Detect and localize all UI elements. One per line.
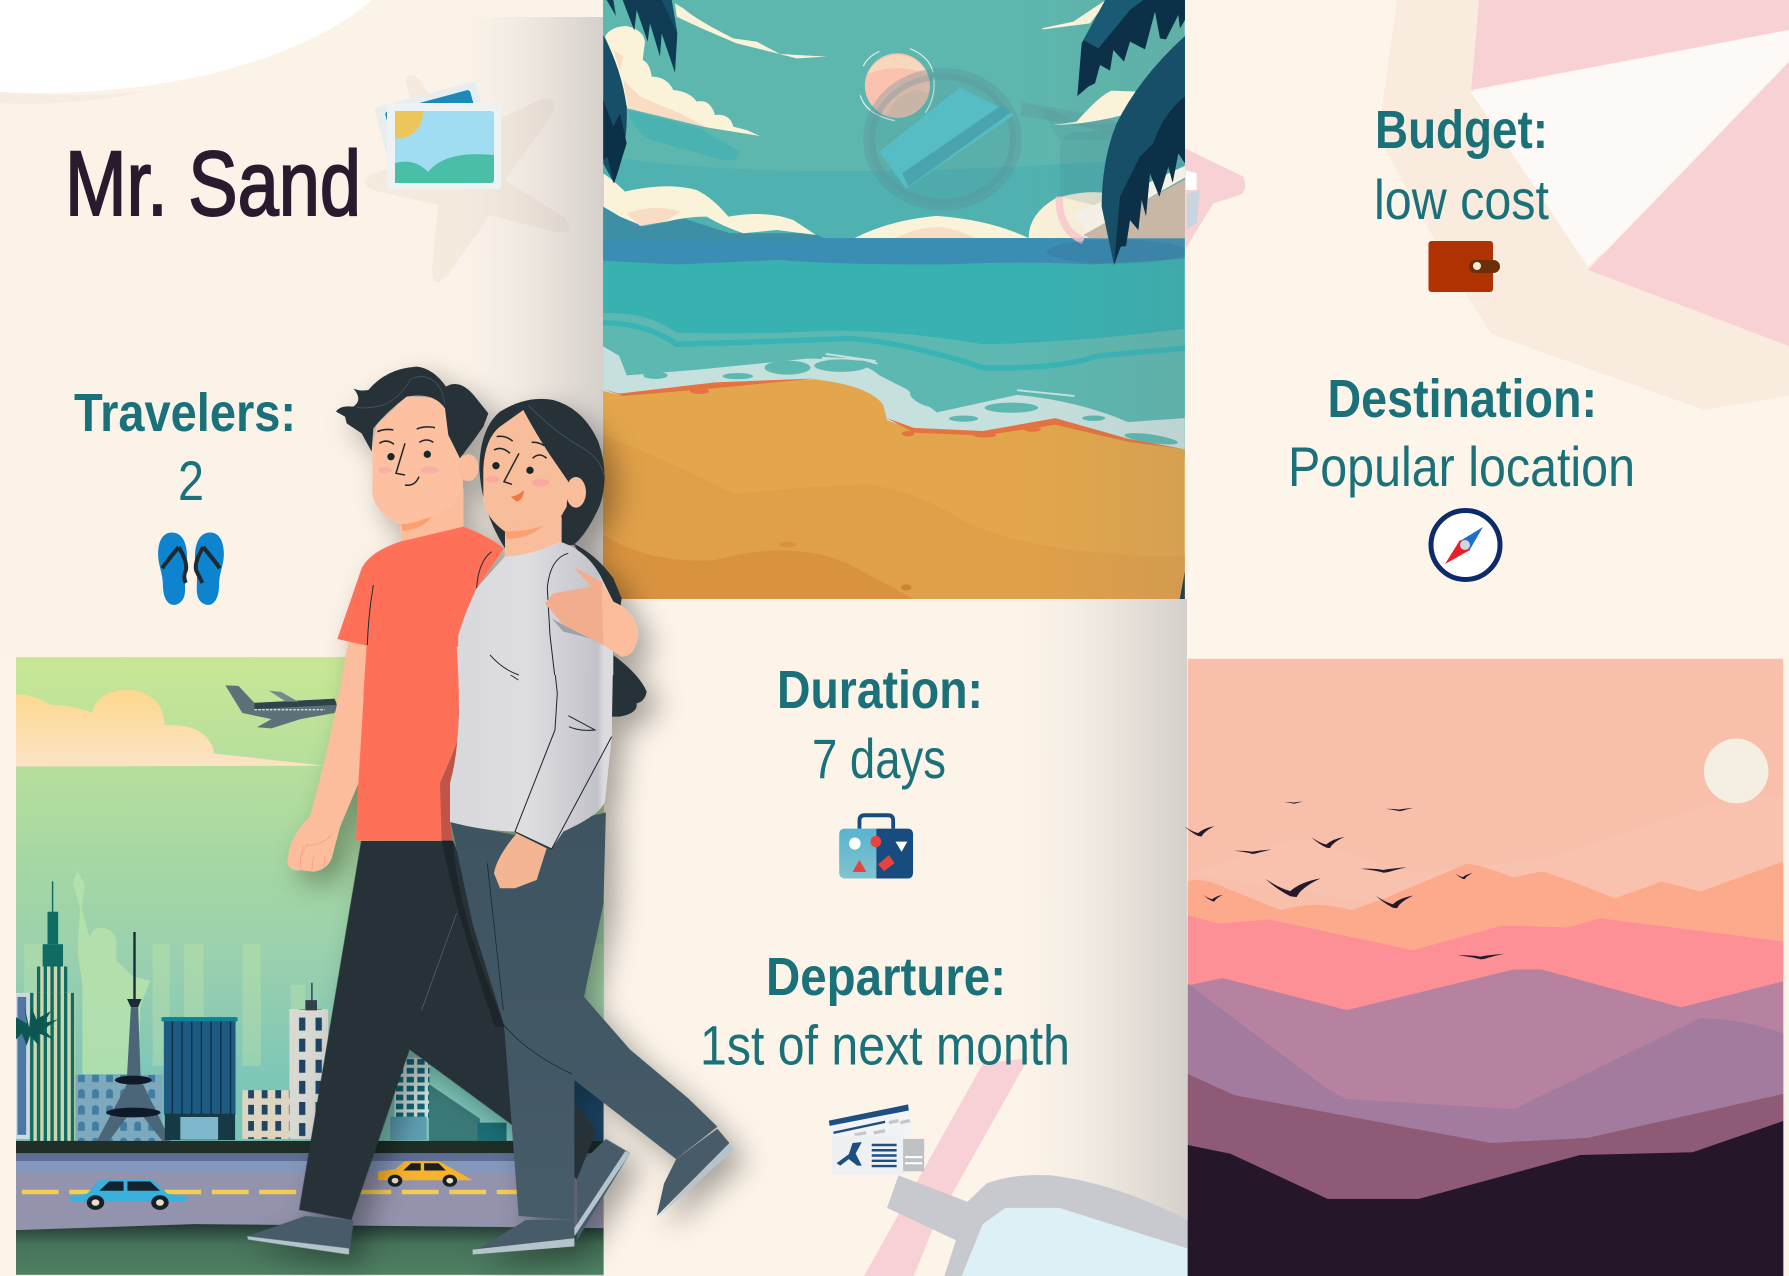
car: yellow	[378, 1161, 473, 1187]
text block: travelers	[74, 383, 296, 512]
text block: travelers: 2	[178, 449, 204, 512]
tower	[97, 932, 171, 1141]
man hair	[336, 367, 488, 458]
foam	[603, 346, 1185, 451]
woman upper head	[479, 399, 605, 558]
right buildings	[395, 1058, 429, 1119]
faint hat shapes	[1378, 0, 1789, 410]
statue of liberty	[73, 870, 150, 1074]
man shirt top	[336, 367, 504, 695]
panel: mountain illustration	[1184, 659, 1783, 1276]
mountain ridges	[1188, 862, 1783, 1276]
building: striped tower	[30, 993, 75, 1145]
text block: destination: Destination:	[1328, 369, 1597, 429]
icon: flip flops	[158, 532, 224, 605]
man shirt body	[356, 647, 462, 841]
text block: budget: Budget:	[1375, 100, 1548, 160]
text block: budget	[1374, 100, 1549, 231]
sand	[603, 379, 1185, 599]
text block: travelers: Travelers:	[74, 383, 296, 443]
sea	[603, 238, 1185, 456]
faint starfish	[365, 75, 570, 282]
title: Mr. Sand	[65, 133, 361, 235]
plane	[225, 685, 337, 728]
faint sunglasses	[864, 1058, 1187, 1276]
text block: duration	[777, 660, 983, 790]
text block: destination: Popular location	[1288, 435, 1635, 498]
car: blue	[70, 1179, 187, 1210]
text block: budget: low cost	[1374, 168, 1549, 231]
text block: departure: Departure:	[766, 947, 1006, 1007]
woman hair tail	[573, 543, 647, 717]
panel: city illustration	[16, 657, 603, 1275]
text block: departure	[700, 947, 1070, 1076]
pink fragment	[1185, 148, 1245, 250]
icon: compass	[1431, 510, 1500, 580]
man neck and arm	[400, 488, 463, 543]
woman sweater top and man hand	[458, 542, 638, 675]
man lower body and shoes	[247, 841, 630, 1254]
text block: destination	[1288, 369, 1635, 498]
panel: right details	[1185, 0, 1789, 660]
faint sunglasses overlay	[869, 74, 1016, 205]
trouser crease	[487, 863, 503, 1010]
clouds and palm: left	[603, 0, 830, 241]
text block: departure: 1st of next month	[700, 1014, 1070, 1076]
palm tree	[16, 1005, 58, 1046]
building: beige	[242, 1090, 291, 1139]
pale skyline	[24, 944, 603, 1066]
woman pants and shoes	[451, 812, 734, 1254]
icon: boarding pass	[829, 1104, 924, 1175]
illustration: couple walking	[247, 367, 734, 1254]
building: white	[289, 1009, 328, 1139]
birds	[1184, 801, 1504, 959]
sun	[865, 53, 930, 118]
text block: duration: 7 days	[812, 727, 946, 790]
clouds and palm: right	[1040, 0, 1187, 265]
grass	[16, 1224, 603, 1275]
cloud	[16, 689, 325, 767]
horizon clouds	[854, 216, 1029, 238]
road	[16, 1141, 603, 1154]
icon: suitcase	[839, 815, 913, 878]
building: blue tower	[164, 1017, 236, 1115]
colosseum	[75, 1075, 162, 1142]
icon: wallet	[1428, 241, 1500, 292]
panel: center details	[604, 599, 1187, 1276]
woman sweater lower	[450, 647, 613, 888]
icon: photos	[374, 81, 501, 189]
white blob	[0, 0, 372, 93]
moon	[1704, 739, 1768, 803]
panel: beach illustration	[603, 0, 1187, 599]
text block: duration: Duration:	[777, 660, 983, 720]
man face	[372, 397, 463, 524]
panel: left intro	[0, 0, 604, 1276]
woman hand	[494, 833, 547, 888]
